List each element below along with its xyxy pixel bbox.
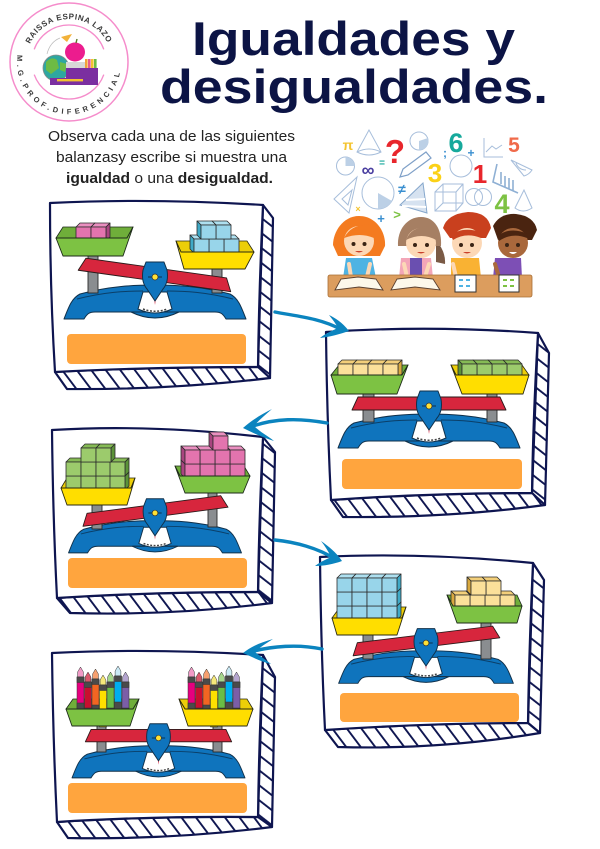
logo name text: RAISSA ESPINA LAZO	[25, 14, 112, 44]
frame	[52, 428, 275, 614]
answer box	[67, 334, 246, 364]
frame	[326, 329, 549, 517]
title: Igualdades y	[192, 12, 515, 65]
balance scale	[61, 432, 250, 553]
math symbols: +	[377, 211, 385, 226]
balance scale	[331, 360, 529, 448]
arrow: box 1 to box 2	[275, 312, 349, 338]
math symbols: 4	[494, 189, 510, 219]
frame	[50, 201, 273, 389]
math doodles	[334, 130, 532, 213]
math symbols: +	[467, 146, 475, 160]
child 3	[443, 212, 491, 278]
math symbols: >	[393, 207, 401, 222]
logo icon: school items	[43, 34, 98, 85]
frame	[320, 555, 544, 747]
panel: balance 1	[50, 201, 273, 389]
arrow: box 2 to box 3	[243, 409, 327, 441]
instructions text: igualdad o una desigualdad.	[66, 170, 273, 187]
answer box	[340, 693, 519, 722]
logo badge	[9, 2, 129, 122]
answer box	[68, 558, 247, 588]
panel: balance 2	[326, 329, 549, 517]
title	[160, 12, 548, 113]
arrow: box 4 to box 5	[243, 639, 322, 664]
math symbols: 6	[448, 128, 464, 158]
math symbols: ×	[355, 204, 361, 214]
instructions text: balanzasy escribe si muestra una	[56, 149, 288, 166]
math symbols: π	[343, 137, 354, 153]
panel: balance 4	[320, 555, 544, 747]
balance scale	[56, 221, 254, 319]
crayons right	[188, 666, 240, 727]
child 1	[333, 216, 385, 278]
math symbols: 5	[508, 134, 520, 157]
child 4	[493, 214, 537, 278]
logo degree text: M.G.PROF.DIFERENCIAL	[17, 55, 120, 114]
title: desigualdades.	[160, 60, 548, 113]
frame	[52, 651, 275, 838]
math symbols: =	[379, 158, 385, 169]
logo outer ring	[10, 3, 128, 121]
instructions text: Observa cada una de las siguientes	[48, 128, 295, 145]
balance scale	[66, 666, 253, 778]
balance scale	[332, 574, 522, 683]
math symbols: ?	[385, 133, 405, 170]
math symbols: 3	[428, 158, 442, 188]
arrow: box 3 to box 4	[275, 540, 342, 566]
open books and tablets	[335, 275, 519, 292]
panel: balance 3	[52, 428, 275, 614]
instructions text	[48, 128, 295, 187]
answer box	[342, 459, 522, 489]
crayons left	[77, 666, 129, 727]
math symbols: ∞	[362, 160, 375, 180]
logo inner ring	[34, 25, 104, 99]
panel: balance 5	[52, 651, 275, 838]
child 2	[398, 217, 445, 278]
answer box	[68, 783, 247, 813]
math doodles and children illustration	[328, 128, 537, 297]
math symbols	[343, 128, 520, 226]
math symbols: 1	[473, 159, 487, 189]
math symbols: ;	[443, 146, 447, 160]
desk	[328, 275, 532, 297]
math symbols: ≠	[398, 181, 406, 197]
